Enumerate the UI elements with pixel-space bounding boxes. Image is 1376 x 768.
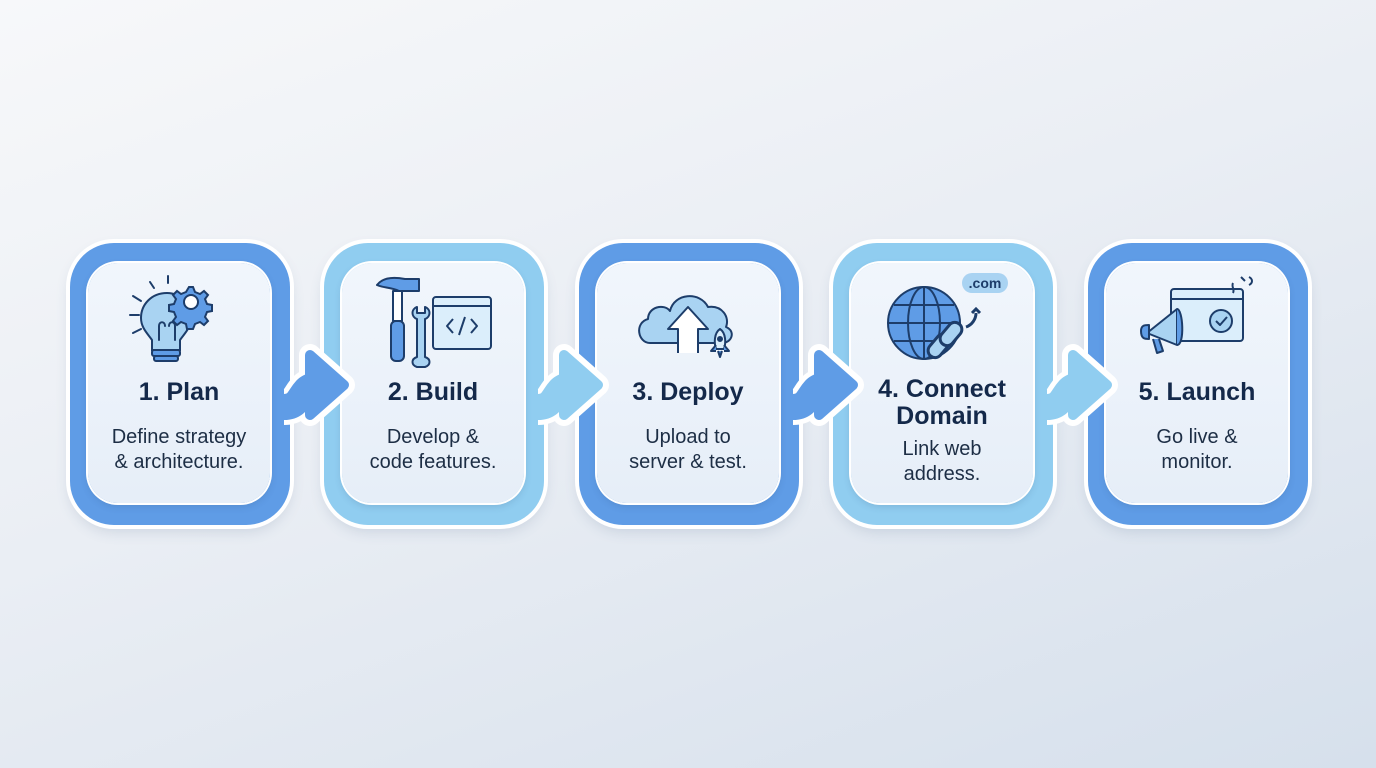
icon: globe with chain and .com: .com (969, 275, 1001, 291)
description: Go live & (1156, 426, 1238, 448)
description: & architecture. (115, 451, 243, 473)
title: 4. Connect Domain: Domain (896, 402, 988, 430)
card 1: plan (70, 243, 290, 525)
description: server & test. (629, 451, 747, 473)
title: 4. Connect Domain (878, 375, 1006, 430)
description (370, 426, 496, 473)
description (903, 438, 981, 485)
description: Link web (903, 438, 981, 460)
icon: megaphone and browser (1140, 276, 1253, 354)
description (629, 426, 747, 473)
description: code features. (370, 451, 496, 473)
card 5: launch (1088, 243, 1308, 525)
description (1156, 426, 1238, 473)
description: Define strategy (112, 426, 246, 448)
description: monitor. (1161, 451, 1233, 473)
arrow 3 (792, 344, 864, 426)
icon: globe with chain and .com (887, 273, 1008, 360)
title: 1. Plan: 1. Plan (139, 378, 219, 406)
card 2: build (324, 243, 544, 525)
icon: lightbulb and gear (129, 275, 213, 362)
icon: hammer, wrench, code window (376, 276, 492, 368)
description: address. (904, 463, 980, 485)
arrow 2 (538, 344, 609, 426)
description: Develop & (387, 426, 479, 448)
arrow 4 (1046, 344, 1118, 426)
icon: cloud upload with rocket (638, 295, 733, 358)
title: 2. Build: 2. Build (388, 378, 478, 406)
card 4: connect domain (833, 243, 1053, 525)
arrow 1 (284, 344, 355, 426)
card 3: deploy (579, 243, 799, 525)
title: 5. Launch: 5. Launch (1139, 378, 1255, 406)
description (112, 426, 246, 473)
description: Upload to (645, 426, 731, 448)
title: 4. Connect Domain: 4. Connect (878, 375, 1006, 403)
title: 3. Deploy: 3. Deploy (632, 378, 744, 406)
